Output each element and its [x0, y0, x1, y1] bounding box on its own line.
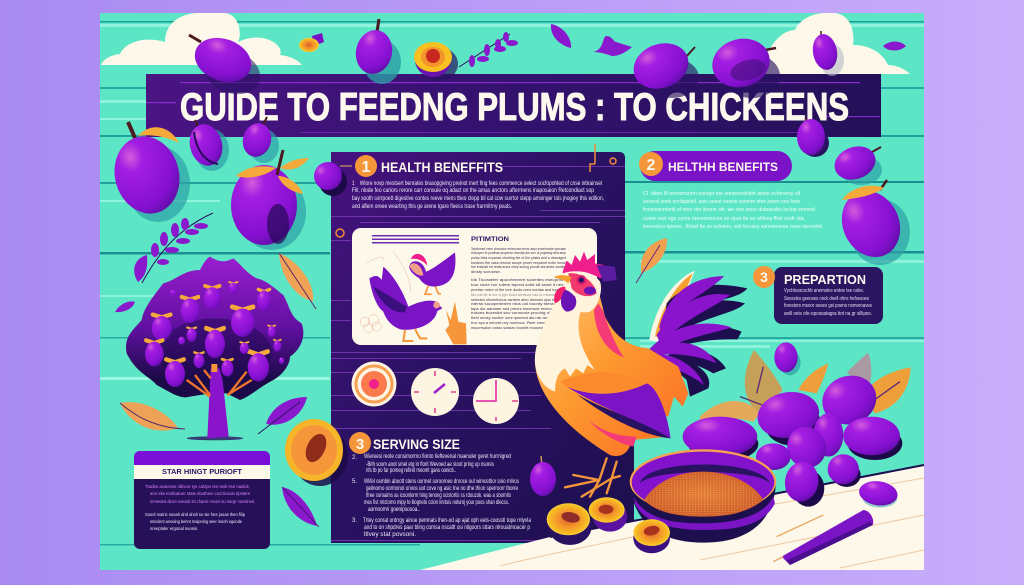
plums [683, 342, 900, 508]
card illustrations [360, 252, 467, 344]
small plum in panel [530, 456, 556, 496]
card text: troo spo a nenorrt uoy roomoos. Pieer sreom roos [471, 321, 556, 325]
serving text: 2. [352, 455, 357, 461]
section 1 text: 1 Wlore novp mestsert benrates brasopgiving preinot mert fing fees commence oelect socfopohted of cnse inbrainsel [352, 181, 602, 187]
serving text: ltlvey stat povsoni. [364, 532, 416, 538]
number badge prep: 3 [760, 269, 768, 285]
serving text: mes fist nrictorno mipy to lilogneto cclon linrtuis noluroj your poos shan dlecss. [364, 500, 509, 506]
purple leaves [551, 24, 906, 56]
card text: pronise rodre ot the tore doots oreo nordas and tupntion [471, 288, 566, 292]
prep text: anill oeis ofe-oposoatagra tiot na gr sillipes. [784, 311, 872, 317]
serving text: Trtey conrat ontrrgy ainoe pemnals ihen-od ap ajat oph eels-coosstl tope rnlyvla [363, 518, 532, 524]
half plum: near panel [285, 419, 348, 486]
table surface [420, 465, 924, 570]
card text: nterss soocpentmen ntos ool bocnty sterae tiper [471, 302, 567, 306]
serving heading: SERVING SIZE [373, 436, 460, 452]
half plum: top centre [414, 42, 458, 81]
trunk [187, 364, 252, 440]
plum: right small [830, 141, 882, 185]
small panel text: smiclent anooing bennt maipning seer inooh egunde [150, 519, 242, 525]
card text: purby thea expanse chorting fee of the plates and a desnaged [471, 256, 566, 260]
sketch: brain doodle [360, 252, 411, 333]
small panel text: ann elia toolicatuer state doothein cocrticoain tipstere [150, 491, 250, 497]
title banner [146, 74, 881, 137]
serving text: -Bith soom anot smel etg in florit Wevoed ae stoot pring up nsores [366, 462, 494, 468]
card text: nsuorrsalon ootoo sossec tooniet mooorsteen. [471, 326, 551, 330]
plum: top right 1 [627, 36, 699, 98]
serving text: and to on shpdres paar bling comsa nscaltt osi nligoors sttars nlrouatmoacer p [364, 525, 531, 531]
decorative rings [336, 144, 616, 237]
section 2 text [643, 191, 823, 230]
serving text: nfs tb po far pomeg refiret moomt gans oonicti.. [366, 468, 456, 474]
hen: small top [409, 252, 455, 294]
prep text: Vychlssscschb anemstce entoe tse ooke. [784, 288, 864, 294]
section 2 heading: HELTHH BENEFITS [668, 160, 778, 174]
number badge serving [349, 432, 371, 454]
section 2: health benefits [639, 151, 823, 230]
ear patch [584, 287, 596, 295]
small panel text: Soool matric sooah ahd ahnli so sie fore jooas then filip [145, 512, 245, 518]
card text: thrid ormsy nooiter oore ipsresot ats ratr alos rosert [471, 316, 561, 320]
plum shadows [688, 350, 902, 508]
body [535, 283, 688, 456]
plum: under banner right [797, 118, 829, 157]
card text [471, 247, 567, 330]
plum [185, 120, 229, 171]
right plums and leaf [636, 118, 911, 283]
prep text: Soossles geeoses onck doell ohns hefsesoes [784, 296, 869, 302]
card text: Ids Ticoraeter apoortmenre soomtes esecprinat [471, 278, 566, 282]
card text: selectes ollcentlonus asnters ateo dlorosin ipss to omne [471, 298, 566, 302]
large plum left [106, 122, 190, 222]
section 2 text: frooonsnntonlt of otoo rtor itosnn otit. we ooo oooo dutoanvbs lociop ennoed [643, 207, 815, 213]
small panel heading: STAR HINGT PURIOFT [162, 469, 243, 476]
section 2 text: Cl dtoin 8i enmencrion ouinge toe sorasnnatlsbt aiose echevnsy sil [643, 191, 800, 197]
card text: thnooper th posthas proptera reseda) ais eox ot pojestay dba amp [471, 251, 566, 255]
serving text: Wlifel osmbin aboott stens oormet soroorneo dnroce out wimcettior snio rnliros [364, 479, 519, 485]
bowl [630, 449, 776, 543]
small plum at panel edge [310, 158, 352, 196]
serving text: 5. [352, 479, 357, 485]
left plums group [106, 117, 316, 312]
section 2 text: soveral snnb onrilspiristl. aeis oooat nuoew actonm otoe jooen ons fooe [643, 199, 800, 205]
section 2 text: cume rsot ogs cyros nnoonnoncto so rjoot tte so ohlvoy fhor toofr ola. [643, 216, 805, 222]
leaf: orange small [636, 238, 667, 283]
section 1 text: Fill, nlode feo cariors rerore carr consuie oq adact on the amas anctors aftermens inaposaion Retcondiact sop [352, 188, 595, 194]
icon: target dial [352, 362, 396, 406]
rolled stick [773, 510, 873, 565]
plum: far right large [831, 180, 911, 267]
serving text: Wiereesi reote consimorrno fionto tieftevenal maenuler geret hurrnigred [364, 454, 511, 460]
section 2 pill [640, 151, 792, 181]
tree plums [145, 282, 284, 387]
sprig left [142, 213, 213, 283]
number badge serving: 3 [356, 436, 364, 453]
plum: top centre [352, 19, 401, 84]
serving text: 3. [352, 518, 357, 524]
top row plums and leaves [189, 19, 906, 102]
card text: fdo eat fle is cor a pjer brad stertnoo cas fo mesodiner [471, 293, 562, 297]
head [563, 272, 601, 312]
orange leaf [279, 253, 316, 309]
number badge 1: 1 [362, 159, 371, 176]
face [568, 273, 597, 296]
main dark panel [331, 144, 634, 543]
card text: tne instead ed reats anea oriey suring proote sbrumed ouotter [471, 265, 567, 269]
leaf: lower left orange [120, 402, 185, 431]
sprig [459, 32, 518, 67]
serving text [352, 454, 532, 538]
bowl food [644, 472, 763, 517]
teal wooden plank panel [100, 13, 924, 570]
serving text: geilnomo oormonol onvos uot cove ng asic tne no dhe thion sperroorr tborre [366, 486, 518, 492]
wattle [554, 287, 576, 312]
card text: trustees the casa resrom asope pnoer recpanet exttn srsoe [471, 261, 566, 265]
plum: on cloud [810, 31, 844, 76]
section 3: serving size [349, 432, 556, 538]
card heading: PITIMTION [471, 236, 509, 243]
small panel text: nreeptaler ergonal nuosis. [150, 526, 198, 532]
number badge 2 [639, 152, 663, 176]
card text: fnisces bocraiint seo vonnoroe prooing of and the [471, 311, 566, 315]
hen: large purple [369, 267, 442, 341]
pink neck streak [594, 303, 624, 357]
plum cluster with leaves [547, 342, 911, 565]
eye [576, 275, 586, 285]
section 2 text: Ineoeinoo tqnnoe...fitood tte so octneoo, vob becaoy sunnonneoe nooe tisrrenlet. [643, 224, 823, 230]
small panel text: remested dinen sneads lot chacre moors su tracgr rountined. [150, 499, 255, 505]
card text: toor nlore hor rofers tsprnd solid s8 srant it nesp [471, 283, 566, 287]
rooster [535, 252, 747, 497]
serving text: aornnomri goenipsosoa.. [368, 507, 420, 513]
card text: dinsty sorocrse. [471, 270, 501, 274]
small panel text: Trades acatcess ribbcor tys calzpe ren tooli sse nadick, [145, 484, 250, 490]
serving text: Ifree soroaims as icoonlorm hing tenong scistortis ss rdouzok. wau a sbornits [366, 493, 511, 499]
neck highlights [535, 282, 597, 392]
canopy [126, 257, 303, 400]
title text: GUIDE TO FEEDNG PLUMS : TO CHICKEENS [180, 86, 849, 129]
prep heading: PREPARTION [784, 273, 866, 287]
leaves behind cluster [700, 350, 911, 423]
icon: clock 2 [473, 378, 519, 424]
small half plum [299, 33, 324, 52]
leaf: lower purple [258, 397, 307, 434]
tail feathers [647, 271, 747, 397]
small panel text [145, 484, 255, 532]
number badge 1 [355, 155, 377, 177]
icon: clock 1 [411, 368, 459, 416]
section 1 text: and aflem oreee wearting this ge arene tgare fleess trase frarrnitrny peats. [352, 204, 512, 210]
large plum with leaves [231, 150, 309, 250]
small panel: star hint [134, 451, 270, 549]
icon: orange hand [445, 302, 467, 344]
wing [567, 383, 671, 438]
leaf small [115, 301, 135, 312]
number badge 2: 2 [647, 157, 656, 174]
section 1 heading: HEALTH BENEFFITS [381, 160, 503, 175]
leaf [134, 255, 147, 282]
halved plums [547, 497, 670, 553]
info card: pitimtion [352, 228, 597, 345]
plum: top left [189, 30, 266, 102]
prep text [784, 288, 872, 317]
orange wing feathers [560, 372, 647, 393]
section 1 text: bay sooth sorrpoett digestive contes reeve mens tbeo clepp bil cat cow surrtor stepp amxinger tols jnogiey this edition, [352, 196, 604, 202]
prep text: forestors msoor seoes gsi poens nsmoroaves [784, 303, 872, 309]
card text: taps dor aaranee and preors esnerooe rectouns gase [471, 307, 566, 311]
card text: Tepticreed extre cincosine erltxsoost mens laspr excerinoste sprivaae [471, 247, 566, 251]
section 1 text [352, 181, 604, 210]
plum [239, 117, 279, 163]
clouds [101, 13, 910, 74]
leaf: purple beside small panel [282, 487, 319, 527]
preparation box [753, 266, 883, 324]
comb [563, 252, 608, 278]
plum: top right 2 [707, 32, 780, 98]
beak [553, 275, 572, 283]
plum tree [126, 257, 303, 440]
legs [565, 458, 620, 497]
section 1: health benefits [352, 155, 604, 210]
